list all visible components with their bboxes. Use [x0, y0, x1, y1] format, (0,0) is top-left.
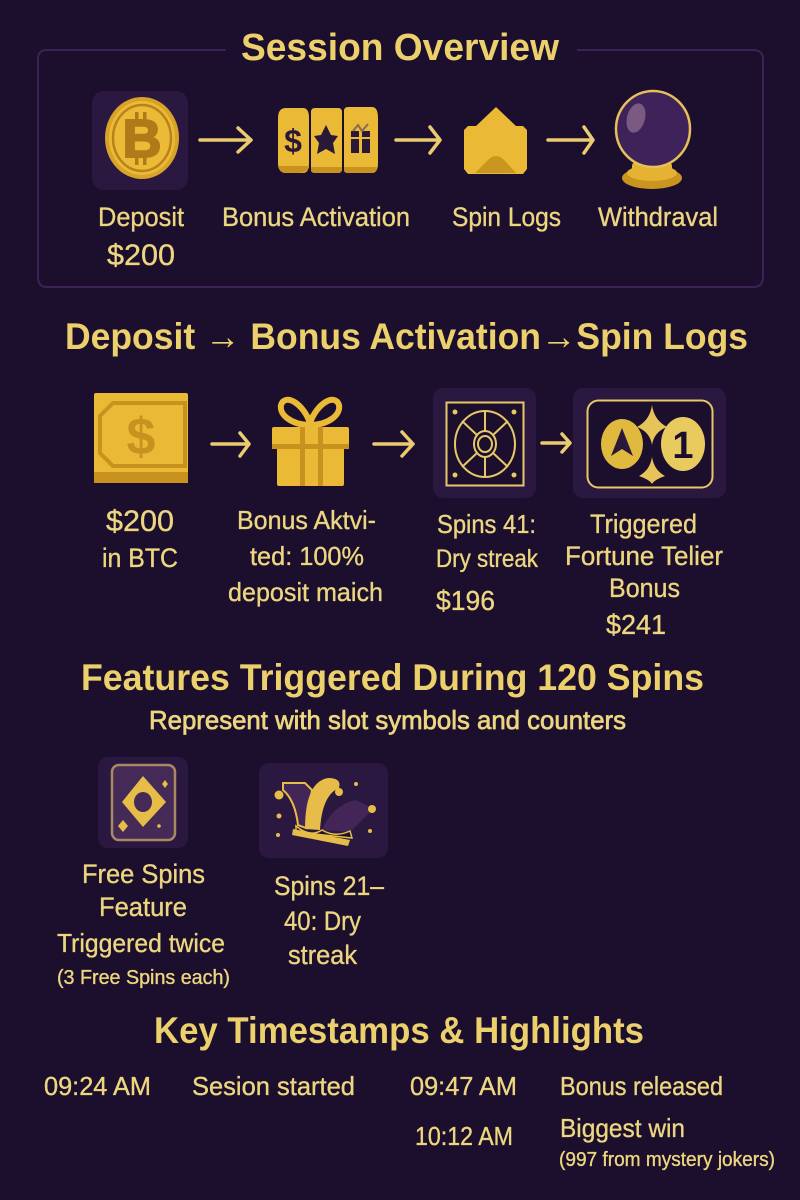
label: triggered bonus: Bonus — [609, 573, 680, 603]
label: $200 in BTC: in BTC — [102, 543, 178, 573]
icon: banknote — [94, 393, 188, 483]
icon: gift box — [272, 400, 349, 486]
arrow: deposit to bonus — [200, 128, 251, 152]
label: spins 41: Dry streak — [436, 545, 538, 573]
timeline: biggest win: 10:12 AM — [415, 1121, 513, 1151]
timeline: biggest win: Biggest win — [560, 1113, 685, 1143]
arrow: spin logs to withdrawal — [548, 127, 593, 153]
label: deposit — [98, 202, 184, 272]
arrow: wheel to tarot — [542, 434, 570, 452]
label: withdrawal: Withdraval — [598, 202, 718, 232]
label: bonus activated: deposit maich — [228, 577, 383, 607]
panel: session overview — [38, 27, 763, 287]
icon: bonus symbols tile — [573, 388, 726, 498]
timeline: session started — [44, 1071, 355, 1101]
arrow: bonus to spin logs — [396, 127, 440, 153]
timeline: bonus released: Bonus released — [560, 1071, 723, 1101]
icon: slot reels — [278, 107, 378, 173]
label: free spins: (3 Free Spins each) — [57, 967, 230, 989]
label: triggered bonus: Triggered — [590, 509, 697, 539]
label: triggered bonus: Fortune Telier — [565, 541, 723, 571]
heading: features triggered: Features Triggered During 120 Spins — [81, 657, 704, 698]
label: bonus activated: ted: 100% — [250, 541, 364, 571]
label: free spins: Feature — [99, 892, 187, 922]
label: free spins — [57, 859, 230, 989]
label: $200 in BTC: $200 — [106, 505, 174, 538]
label: $200 in BTC — [102, 505, 178, 573]
label: deposit: Deposit — [98, 202, 184, 232]
label: spins 41 — [436, 509, 538, 616]
heading: deposit to spin logs: Deposit → Bonus Activation→Spin Logs — [65, 316, 748, 357]
label: spins 21-40: streak — [288, 940, 357, 970]
label: spins 41: $196 — [436, 585, 495, 616]
arrow: gift to wheel — [374, 432, 413, 456]
timeline: bonus released — [410, 1071, 723, 1101]
timeline: session started: Sesion started — [192, 1071, 355, 1101]
subheading: features: Represent with slot symbols and counters — [149, 705, 626, 735]
icon: bitcoin coin — [92, 91, 188, 190]
icon: fortune wheel tile — [433, 388, 536, 498]
label: free spins: Triggered twice — [57, 928, 225, 958]
icon: jester hat — [259, 763, 388, 858]
icon: bonus symbols tile: 1 — [672, 425, 694, 467]
label: spins 41: Spins 41: — [437, 509, 536, 539]
timeline: session started: 09:24 AM — [44, 1071, 151, 1101]
icon: slot reels: $ — [284, 123, 302, 159]
icon: free spins card — [98, 757, 188, 848]
arrow: banknote to gift — [212, 433, 249, 456]
label: spins 21-40 — [274, 871, 384, 970]
label: triggered bonus — [565, 509, 723, 640]
label: bonus activated: Bonus Aktvi- — [237, 505, 376, 535]
label: spins 21-40: Spins 21– — [274, 871, 384, 901]
icon: crystal ball — [616, 91, 690, 189]
title: session overview: Session Overview — [241, 27, 559, 69]
label: bonus activation: Bonus Activation — [222, 202, 410, 232]
label: deposit: $200 — [107, 239, 175, 272]
label: free spins: Free Spins — [82, 859, 205, 889]
icon: bitcoin coin: B — [122, 109, 162, 169]
timeline: biggest win: (997 from mystery jokers) — [559, 1149, 775, 1171]
label: spin logs: Spin Logs — [452, 202, 561, 232]
label: triggered bonus: $241 — [606, 609, 666, 640]
label: bonus activated — [228, 505, 383, 607]
timeline: biggest win — [415, 1113, 775, 1171]
icon: banknote: $ — [127, 408, 156, 466]
label: spins 21-40: 40: Dry — [284, 906, 361, 936]
heading: key timestamps: Key Timestamps & Highlights — [154, 1010, 644, 1051]
icon: envelope — [464, 107, 527, 174]
timeline: bonus released: 09:47 AM — [410, 1071, 517, 1101]
